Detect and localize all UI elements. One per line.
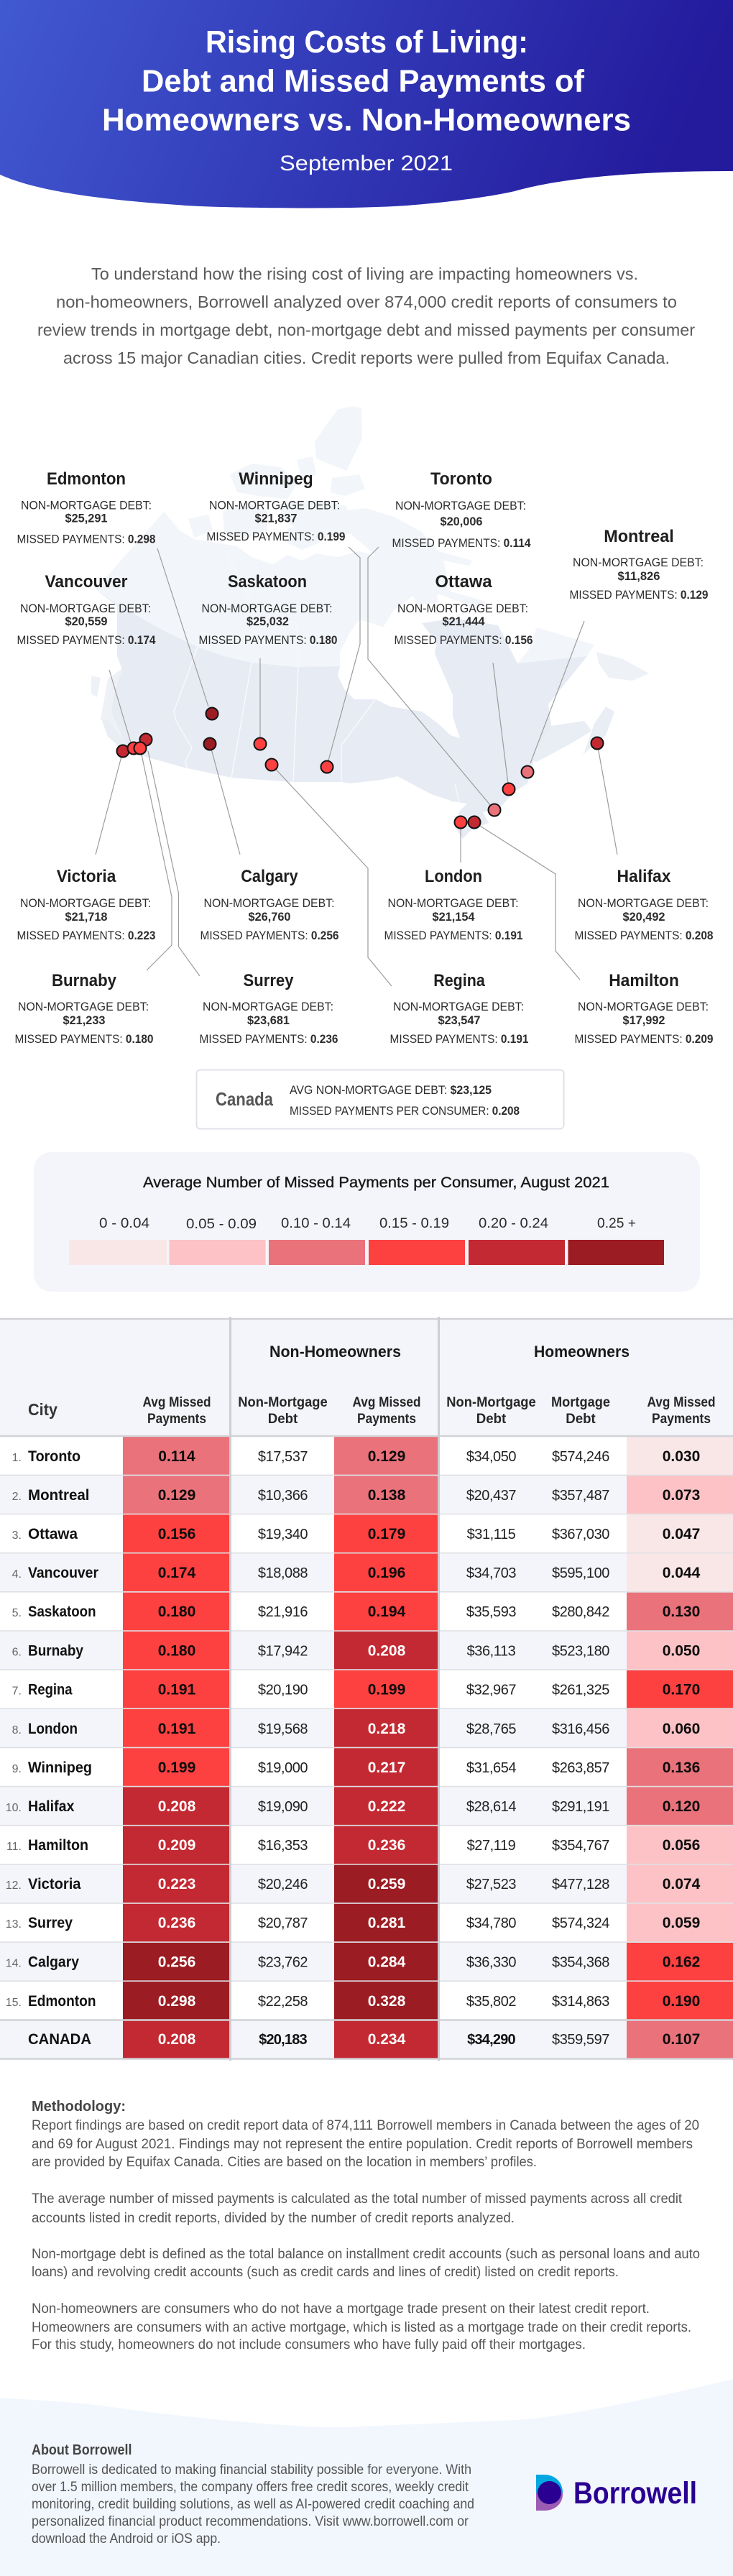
label: Victoria: MISSED PAYMENTS: 0.223 <box>17 929 156 942</box>
row: Surrey: $574,324 <box>552 1915 609 1931</box>
methodology text <box>32 2099 700 2352</box>
row: Ottawa: 0.179 <box>368 1526 405 1542</box>
label: Winnipeg: $21,837 <box>254 512 298 525</box>
row: Hamilton: $27,119 <box>467 1838 516 1854</box>
row: Winnipeg: 0.199 <box>158 1760 195 1776</box>
label: Winnipeg: NON-MORTGAGE DEBT: <box>209 499 340 512</box>
row: London: London <box>28 1721 78 1737</box>
label: London: London <box>425 867 482 886</box>
row: Hamilton: $354,767 <box>552 1838 609 1854</box>
row: Edmonton <box>6 1982 733 2020</box>
row: Toronto: Toronto <box>28 1448 80 1465</box>
about Borrowell text: download the Android or iOS app. <box>32 2531 221 2547</box>
row: Saskatoon: $21,916 <box>258 1604 308 1620</box>
intro text <box>37 264 695 367</box>
row: Victoria: $477,128 <box>552 1877 609 1892</box>
row: Vancouver: Vancouver <box>28 1565 98 1581</box>
label: London: $21,154 <box>433 910 475 924</box>
label: Hamilton: Hamilton <box>609 971 679 990</box>
row: Ottawa: $31,115 <box>467 1527 516 1542</box>
row: Surrey: 0.059 <box>663 1915 700 1931</box>
label: Burnaby: $21,233 <box>63 1013 105 1027</box>
table header <box>0 1319 733 1436</box>
row: Regina: $20,190 <box>258 1682 308 1698</box>
legend scale: 0.10 - 0.14 <box>281 1216 351 1231</box>
label: Toronto: MISSED PAYMENTS: 0.114 <box>392 536 531 550</box>
Borrowell logo: Borrowell <box>573 2476 697 2511</box>
row: Winnipeg <box>12 1748 733 1787</box>
table header: Payments <box>357 1412 416 1427</box>
table header: Payments <box>652 1412 711 1427</box>
label: Ottawa: Ottawa <box>435 572 492 592</box>
row: Victoria: $20,246 <box>258 1877 308 1892</box>
legend scale: 0.20 - 0.24 <box>479 1216 548 1231</box>
row: Ottawa: $367,030 <box>552 1527 609 1542</box>
legend scale: 0.05 - 0.09 <box>186 1217 257 1232</box>
row: Saskatoon: $280,842 <box>552 1604 609 1620</box>
label: London: MISSED PAYMENTS: 0.191 <box>384 929 523 942</box>
row: Hamilton: 0.236 <box>368 1837 405 1854</box>
label: Saskatoon: Saskatoon <box>228 572 307 592</box>
row: Winnipeg: $31,654 <box>466 1760 516 1776</box>
row: Surrey: Surrey <box>28 1915 73 1931</box>
label: Toronto: $20,006 <box>440 515 483 528</box>
row: Calgary <box>0 1943 733 1982</box>
label: Edmonton: Edmonton <box>47 469 126 489</box>
label: Ottawa <box>394 572 533 647</box>
row: Burnaby: 0.180 <box>158 1643 195 1659</box>
row: Vancouver: 4. <box>12 1568 22 1581</box>
row: Calgary: 0.284 <box>368 1954 406 1971</box>
row: Saskatoon: 5. <box>12 1607 22 1619</box>
title: Homeowners vs. Non-Homeowners <box>102 102 631 138</box>
methodology text: For this study, homeowners do not include consumers who have fully paid off their mortgages. <box>32 2337 586 2352</box>
row: Canada total: 0.208 <box>158 2031 196 2048</box>
about Borrowell text: monitoring, credit building solutions, as well as AI-powered credit coaching and <box>32 2497 474 2512</box>
row: Toronto: 1. <box>12 1452 22 1464</box>
label: Montreal: NON-MORTGAGE DEBT: <box>573 556 704 569</box>
label: London <box>384 867 523 942</box>
row: Toronto <box>12 1437 733 1476</box>
row: Surrey: 13. <box>6 1918 22 1931</box>
row: Winnipeg: 9. <box>12 1763 22 1775</box>
label: Toronto: NON-MORTGAGE DEBT: <box>395 499 526 512</box>
row: Vancouver: $18,088 <box>258 1565 308 1581</box>
row: Montreal <box>0 1476 733 1514</box>
table header: Non-Homeowners <box>269 1343 401 1361</box>
row: Hamilton <box>6 1826 733 1865</box>
row: London <box>0 1709 733 1748</box>
row: London: $28,765 <box>466 1721 516 1737</box>
label: Surrey: MISSED PAYMENTS: 0.236 <box>200 1032 338 1046</box>
header banner <box>0 0 733 208</box>
about Borrowell text: over 1.5 million members, the company offers free credit scores, weekly credit <box>32 2480 469 2495</box>
row: Saskatoon: Saskatoon <box>28 1604 96 1620</box>
label: Burnaby: MISSED PAYMENTS: 0.180 <box>14 1032 154 1046</box>
row: Regina: $261,325 <box>552 1682 609 1698</box>
footer wave background <box>0 2379 733 2576</box>
label: Halifax: NON-MORTGAGE DEBT: <box>578 896 709 910</box>
label: Halifax: MISSED PAYMENTS: 0.208 <box>575 929 713 942</box>
row: Ottawa <box>12 1514 733 1553</box>
row: Burnaby: 0.208 <box>368 1643 406 1659</box>
legend scale: 0 - 0.04 <box>99 1216 149 1231</box>
row: Victoria: Victoria <box>28 1876 81 1892</box>
row: Canada total <box>0 2020 733 2058</box>
label: Vancouver: $20,559 <box>65 615 108 628</box>
row: Burnaby: $17,942 <box>258 1643 308 1659</box>
label: Ottawa: NON-MORTGAGE DEBT: <box>397 602 528 615</box>
row: Halifax: 0.120 <box>663 1798 700 1815</box>
methodology text: loans) and revolving credit accounts (such as credit cards and lines of credit) listed on credit reports. <box>32 2265 619 2280</box>
row: Burnaby: $523,180 <box>552 1643 609 1659</box>
label: Toronto: Toronto <box>430 469 492 489</box>
about Borrowell text: Borrowell is dedicated to making financial stability possible for everyone. With <box>32 2462 471 2478</box>
row: London: 8. <box>12 1724 22 1736</box>
methodology text: Methodology: <box>32 2099 126 2115</box>
leader lines <box>96 547 617 986</box>
legend title: Average Number of Missed Payments per Consumer, August 2021 <box>143 1174 609 1191</box>
row: Halifax: 0.222 <box>368 1798 405 1815</box>
label: Vancouver: Vancouver <box>45 572 128 592</box>
row: Burnaby: Burnaby <box>28 1643 83 1659</box>
label: Edmonton <box>17 469 156 546</box>
label: Toronto <box>392 469 531 550</box>
row: Ottawa: 3. <box>12 1530 22 1542</box>
row: Halifax: 0.208 <box>158 1798 196 1815</box>
row: Vancouver: $595,100 <box>552 1565 609 1581</box>
row: Victoria <box>0 1864 733 1904</box>
row: Hamilton: 0.056 <box>663 1837 700 1854</box>
label: Halifax: $20,492 <box>622 910 665 924</box>
row: Calgary: 0.162 <box>663 1954 700 1971</box>
row: Calgary: $354,368 <box>552 1955 609 1971</box>
label: Burnaby <box>14 971 154 1046</box>
label: Vancouver: MISSED PAYMENTS: 0.174 <box>17 633 156 647</box>
map of Canada silhouette <box>91 406 649 839</box>
row: Calgary: Calgary <box>28 1954 79 1971</box>
label: Burnaby: Burnaby <box>52 971 117 990</box>
row: Surrey: $34,780 <box>466 1915 516 1931</box>
Canada summary box: AVG NON-MORTGAGE DEBT: $23,125 <box>290 1083 492 1097</box>
label: Calgary: NON-MORTGAGE DEBT: <box>204 896 335 910</box>
legend scale: 0.25 + <box>597 1216 636 1231</box>
row: Montreal: $10,366 <box>258 1488 308 1504</box>
row: Surrey <box>6 1904 733 1943</box>
row: Vancouver: 0.196 <box>368 1565 405 1581</box>
label: Montreal: MISSED PAYMENTS: 0.129 <box>569 588 709 602</box>
row: Winnipeg: 0.217 <box>368 1760 405 1776</box>
label: Surrey <box>200 971 338 1046</box>
table header: Mortgage <box>551 1395 610 1410</box>
row: Regina: Regina <box>28 1682 73 1698</box>
subtitle: date: September 2021 <box>280 152 453 175</box>
row: Canada total: CANADA <box>28 2031 91 2048</box>
row: Edmonton: 0.328 <box>368 1993 406 2010</box>
label: Surrey: NON-MORTGAGE DEBT: <box>203 1000 333 1013</box>
header wave background <box>0 0 733 208</box>
row: Calgary: $36,330 <box>466 1955 516 1971</box>
row: Toronto: $17,537 <box>258 1449 308 1465</box>
row: Halifax: Halifax <box>28 1798 75 1815</box>
row: Ottawa: $19,340 <box>258 1527 308 1542</box>
row: Winnipeg: $263,857 <box>552 1760 609 1776</box>
row: Regina: $32,967 <box>466 1682 516 1698</box>
row: Vancouver: $34,703 <box>466 1565 516 1581</box>
row: Montreal: 0.073 <box>663 1487 700 1504</box>
row: Canada total: $359,597 <box>552 2032 609 2048</box>
label: Surrey: Surrey <box>243 971 294 990</box>
row: Victoria: $27,523 <box>466 1877 516 1892</box>
row: Regina: 0.191 <box>158 1682 196 1698</box>
label: Regina: NON-MORTGAGE DEBT: <box>393 1000 524 1013</box>
row: Calgary: $23,762 <box>258 1955 308 1971</box>
label: Victoria: Victoria <box>57 867 116 886</box>
label: Regina: Regina <box>433 971 485 990</box>
title: Debt and Missed Payments of <box>142 63 584 99</box>
row: Calgary: 14. <box>6 1958 22 1969</box>
label: Victoria: $21,718 <box>65 910 108 924</box>
row: Surrey: 0.281 <box>368 1915 406 1931</box>
row: Toronto: 0.114 <box>158 1448 195 1465</box>
row: London: $316,456 <box>552 1721 609 1737</box>
row: Ottawa: 0.156 <box>158 1526 195 1542</box>
label: Regina: MISSED PAYMENTS: 0.191 <box>389 1032 529 1046</box>
label: Calgary <box>200 867 339 942</box>
row: Edmonton: $314,863 <box>552 1994 609 2010</box>
methodology text: Non-mortgage debt is defined as the total balance on installment credit accounts (such as personal loans and auto <box>32 2247 700 2262</box>
Canada summary box: MISSED PAYMENTS PER CONSUMER: 0.208 <box>290 1104 520 1118</box>
label: Saskatoon: MISSED PAYMENTS: 0.180 <box>198 633 338 647</box>
row: Burnaby: $36,113 <box>467 1643 516 1659</box>
row: Halifax: $28,614 <box>466 1799 516 1815</box>
row: Saskatoon: 0.180 <box>158 1604 195 1620</box>
row: Edmonton: Edmonton <box>28 1993 96 2010</box>
row: Winnipeg: 0.136 <box>663 1760 700 1776</box>
methodology text: Homeowners are consumers with an active mortgage, which is listed as a mortgage trade on their credit reports. <box>32 2320 691 2335</box>
Canada summary box <box>197 1070 563 1128</box>
row: London: 0.191 <box>158 1721 196 1737</box>
table header: Debt <box>566 1412 596 1427</box>
label: Burnaby: NON-MORTGAGE DEBT: <box>18 1000 149 1013</box>
row: Burnaby <box>0 1632 733 1670</box>
row: Regina: 7. <box>12 1685 22 1698</box>
title <box>102 24 631 138</box>
row: Edmonton: $35,802 <box>466 1994 516 2010</box>
methodology text: are provided by Equifax Canada. Cities are based on the location in members’ profiles. <box>32 2155 537 2170</box>
about Borrowell text: About Borrowell <box>32 2442 132 2458</box>
label: Edmonton: MISSED PAYMENTS: 0.298 <box>17 532 156 546</box>
row: London: 0.060 <box>663 1721 700 1737</box>
table header: Payments <box>147 1412 206 1427</box>
label: Surrey: $23,681 <box>247 1013 290 1027</box>
row: Montreal: 0.129 <box>158 1487 195 1504</box>
label: Montreal: $11,826 <box>618 569 660 583</box>
row: Regina <box>12 1670 733 1709</box>
row: Surrey: $20,787 <box>258 1915 308 1931</box>
legend panel <box>34 1152 700 1292</box>
label: London: NON-MORTGAGE DEBT: <box>388 896 519 910</box>
label: Saskatoon: NON-MORTGAGE DEBT: <box>201 602 332 615</box>
label: Hamilton: MISSED PAYMENTS: 0.209 <box>575 1032 713 1046</box>
legend scale: 0.15 - 0.19 <box>379 1216 449 1231</box>
label: Hamilton: $17,992 <box>622 1013 665 1027</box>
row: Victoria: 12. <box>6 1880 22 1892</box>
Canada summary box: Canada <box>216 1088 273 1110</box>
row: Winnipeg: $19,000 <box>258 1760 308 1776</box>
label: Calgary: MISSED PAYMENTS: 0.256 <box>200 929 339 942</box>
label: Halifax: Halifax <box>617 867 671 886</box>
row: Victoria: 0.074 <box>663 1876 701 1892</box>
about Borrowell text <box>32 2442 474 2547</box>
row: Halifax: $291,191 <box>552 1799 609 1815</box>
row: Toronto: $574,246 <box>552 1449 609 1465</box>
row: Surrey: 0.236 <box>158 1915 195 1931</box>
label: Hamilton <box>575 971 713 1046</box>
label: Saskatoon <box>198 572 338 647</box>
footer panel <box>0 2379 733 2576</box>
methodology text: accounts listed in credit reports, divided by the number of credit reports analyzed. <box>32 2211 515 2226</box>
row: London: 0.218 <box>368 1721 406 1737</box>
row: Edmonton: 15. <box>6 1997 22 2009</box>
row: Edmonton: 0.190 <box>663 1993 700 2010</box>
label: Regina: $23,547 <box>438 1013 480 1027</box>
intro text: review trends in mortgage debt, non-mortgage debt and missed payments per consumer <box>37 321 695 339</box>
row: Canada total: 0.107 <box>663 2031 700 2048</box>
label: Winnipeg: Winnipeg <box>239 469 313 489</box>
row: Winnipeg: Winnipeg <box>28 1760 92 1776</box>
label: Regina <box>389 971 529 1046</box>
label: Saskatoon: $25,032 <box>246 615 289 628</box>
label: Calgary: Calgary <box>241 867 298 886</box>
label: Winnipeg <box>207 469 345 543</box>
row: Toronto: 0.129 <box>368 1448 405 1465</box>
methodology text: The average number of missed payments is calculated as the total number of missed payments across all credit <box>32 2191 683 2207</box>
table header: Debt <box>476 1412 507 1427</box>
label: Edmonton: NON-MORTGAGE DEBT: <box>21 499 152 512</box>
label: Halifax <box>575 867 713 942</box>
row: Canada total: $34,290 <box>467 2032 516 2048</box>
title: Rising Costs of Living: <box>206 24 528 60</box>
row: Canada total: 0.234 <box>368 2031 406 2048</box>
label: Vancouver: NON-MORTGAGE DEBT: <box>20 602 151 615</box>
methodology text: Report findings are based on credit report data of 874,111 Borrowell members in Canada between the ages of 20 <box>32 2118 699 2133</box>
table header: Avg Missed <box>647 1395 716 1410</box>
row: Toronto: $34,050 <box>466 1449 516 1465</box>
row: Canada total: $20,183 <box>259 2032 308 2048</box>
row: Halifax: $19,090 <box>258 1799 308 1815</box>
row: Victoria: 0.223 <box>158 1876 195 1892</box>
row: Edmonton: $22,258 <box>258 1994 308 2010</box>
table header: Debt <box>268 1412 298 1427</box>
row: Toronto: 0.030 <box>663 1448 700 1465</box>
data table <box>0 1317 733 2061</box>
row: Montreal: $357,487 <box>552 1488 609 1504</box>
label: Ottawa: $21,444 <box>443 615 485 628</box>
methodology text: Non-homeowners are consumers who do not have a mortgage trade present on their latest credit report. <box>32 2301 650 2317</box>
label: Montreal: Montreal <box>604 527 674 546</box>
table header: Avg Missed <box>352 1395 421 1410</box>
legend scale <box>69 1216 664 1265</box>
label: Vancouver <box>17 572 156 647</box>
row: Hamilton: $16,353 <box>258 1838 308 1854</box>
table header: Homeowners <box>534 1343 630 1361</box>
label: Ottawa: MISSED PAYMENTS: 0.156 <box>394 633 533 647</box>
row: Hamilton: Hamilton <box>28 1837 88 1854</box>
label: Montreal <box>569 527 709 602</box>
label: Victoria: NON-MORTGAGE DEBT: <box>20 896 151 910</box>
row: Burnaby: 0.050 <box>663 1643 700 1659</box>
row: Vancouver <box>0 1553 733 1593</box>
row: Montreal: 0.138 <box>368 1487 406 1504</box>
row: Ottawa: 0.047 <box>663 1526 700 1542</box>
row: Regina: 0.199 <box>368 1682 405 1698</box>
label: Calgary: $26,760 <box>249 910 290 924</box>
row: Montreal: Montreal <box>28 1487 89 1504</box>
row: Regina: 0.170 <box>663 1682 700 1698</box>
label: Hamilton: NON-MORTGAGE DEBT: <box>578 1000 709 1013</box>
about Borrowell text: personalized financial product recommendations. Visit www.borrowell.com or <box>32 2514 469 2529</box>
table header: City <box>28 1400 57 1419</box>
row: Victoria: 0.259 <box>368 1876 405 1892</box>
table header: Avg Missed <box>142 1395 211 1410</box>
row: Halifax: 10. <box>6 1802 22 1814</box>
row: Saskatoon: 0.130 <box>663 1604 700 1620</box>
row: Vancouver: 0.174 <box>158 1565 196 1581</box>
row: Saskatoon: 0.194 <box>368 1604 406 1620</box>
row: Saskatoon: $35,593 <box>466 1604 516 1620</box>
methodology text: and 69 for August 2021. Findings may not represent the entire population. Credit reports of Borrowell members <box>32 2137 693 2152</box>
Borrowell logo <box>536 2475 697 2511</box>
label: Winnipeg: MISSED PAYMENTS: 0.199 <box>207 530 345 543</box>
intro text: non-homeowners, Borrowell analyzed over 874,000 credit reports of consumers to <box>56 293 677 311</box>
row: Burnaby: 6. <box>12 1646 22 1659</box>
table header: Non-Mortgage <box>446 1395 536 1410</box>
row: Halifax <box>0 1787 733 1826</box>
label: Edmonton: $25,291 <box>65 512 108 525</box>
row: Hamilton: 11. <box>6 1841 22 1853</box>
city markers <box>116 707 604 828</box>
row: Vancouver: 0.044 <box>663 1565 701 1581</box>
label: Victoria <box>17 867 156 942</box>
row: Hamilton: 0.209 <box>158 1837 195 1854</box>
row: Calgary: 0.256 <box>158 1954 195 1971</box>
row: Ottawa: Ottawa <box>28 1526 78 1542</box>
row: Montreal: $20,437 <box>466 1488 516 1504</box>
row: Edmonton: 0.298 <box>158 1993 196 2010</box>
row: Saskatoon <box>12 1593 733 1632</box>
table header: Non-Mortgage <box>238 1395 328 1410</box>
row: London: $19,568 <box>258 1721 308 1737</box>
intro text: To understand how the rising cost of living are impacting homeowners vs. <box>91 264 638 283</box>
row: Montreal: 2. <box>12 1491 22 1503</box>
intro text: across 15 major Canadian cities. Credit reports were pulled from Equifax Canada. <box>63 349 670 367</box>
